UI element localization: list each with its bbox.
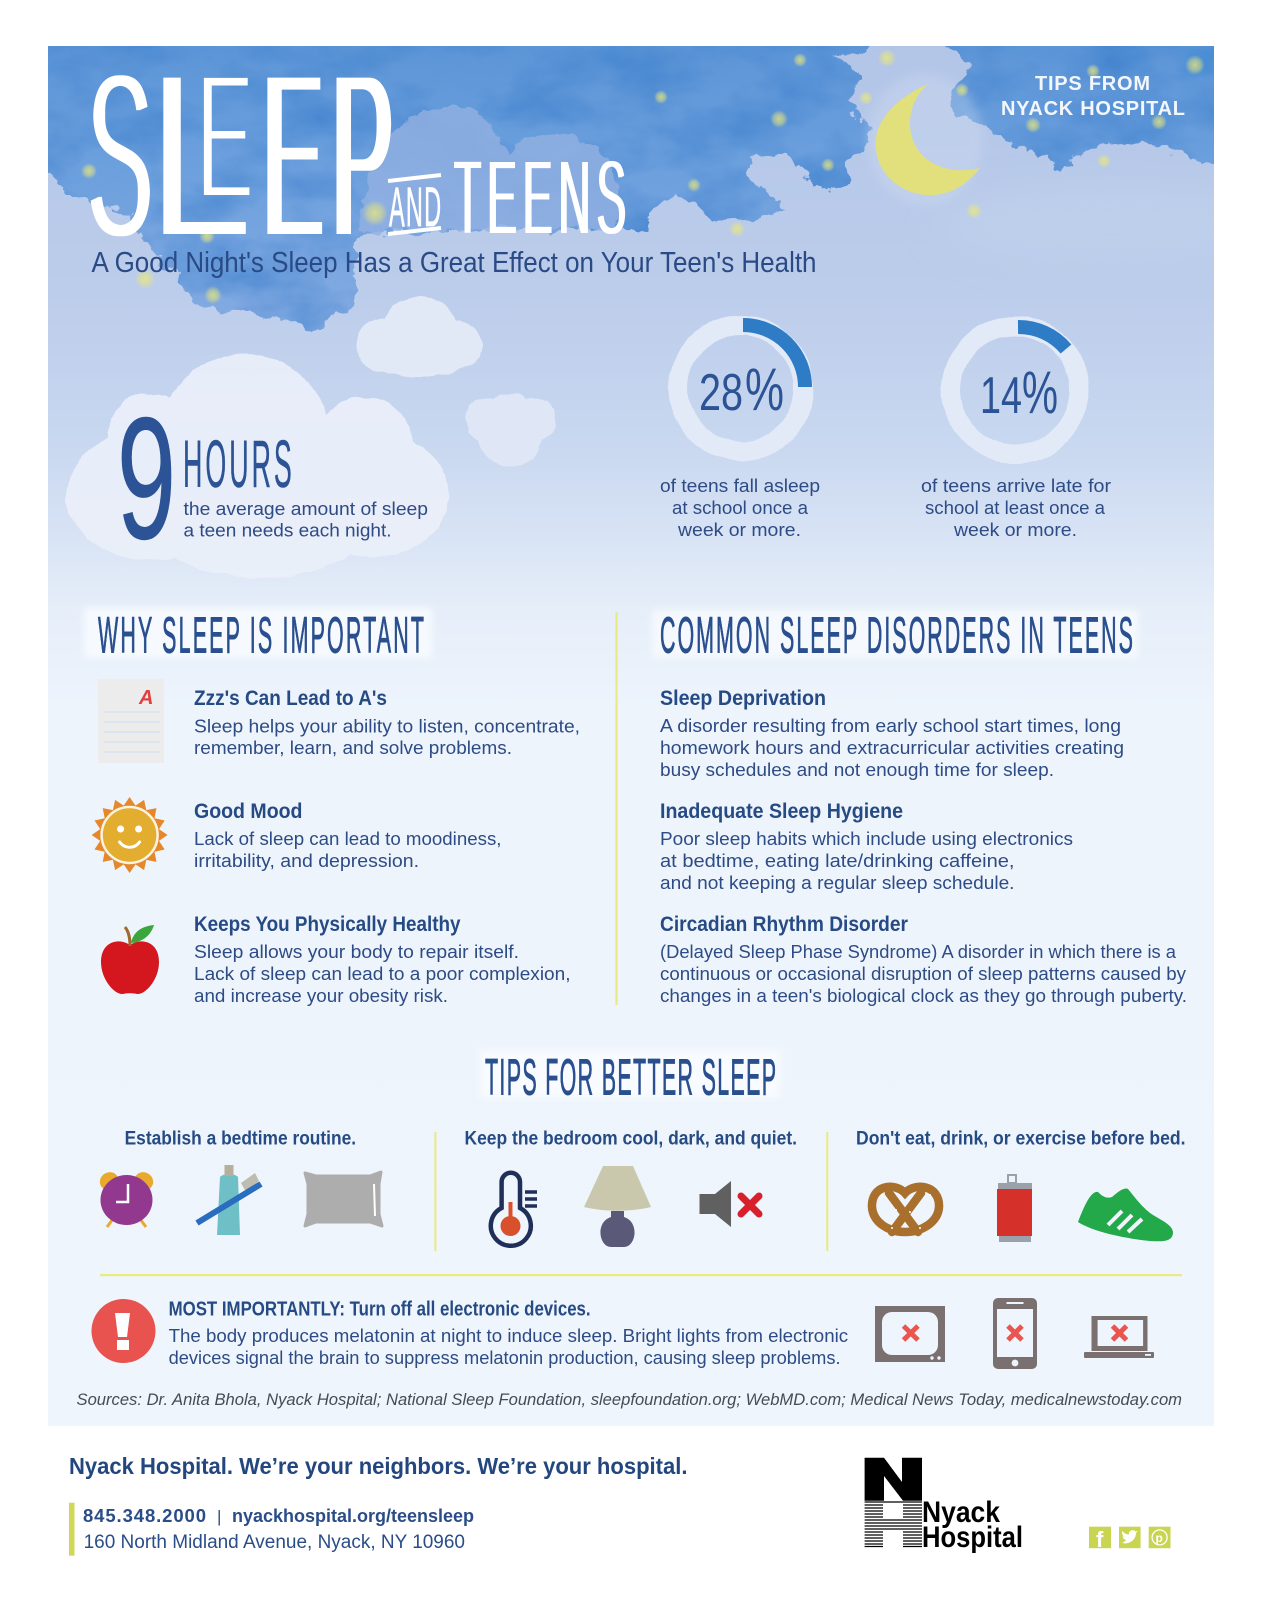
tip heading: don't eat: Don't eat, drink, or exercise before bed. — [856, 1128, 1186, 1150]
tip heading: bedtime routine: Establish a bedtime routine. — [125, 1128, 356, 1150]
stars — [81, 49, 1205, 304]
callout text — [169, 1326, 848, 1368]
item: sleep deprivation: Sleep Deprivation — [660, 687, 826, 710]
item: physically healthy: and increase your obesity risk. — [194, 986, 448, 1006]
stat text: 28 percent — [660, 476, 820, 540]
panel: common sleep disorders — [652, 608, 1187, 1006]
icon: pillow — [305, 1172, 382, 1226]
icon: apple — [101, 925, 159, 994]
title: Sleep and Teens — [87, 24, 626, 288]
icon: soda can — [997, 1175, 1032, 1242]
callout text: devices signal the brain to suppress melatonin production, causing sleep problems. — [169, 1348, 841, 1368]
icon: pretzel — [872, 1187, 939, 1232]
icon: toothbrush and toothpaste — [197, 1165, 261, 1235]
item: inadequate sleep hygiene: Inadequate Sleep Hygiene — [660, 800, 903, 823]
donut chart: 14 percent: 14 — [980, 367, 1022, 425]
icon: smiling sun — [92, 797, 168, 873]
donut chart: 28 percent: % — [745, 356, 784, 423]
icon: red exclamation — [92, 1299, 156, 1363]
logo: Nyack Hospital: Hospital — [922, 1521, 1023, 1554]
callout: most importantly — [92, 1298, 1154, 1369]
title: Sleep and Teens: P — [332, 24, 393, 288]
footer: contact: 160 North Midland Avenue, Nyack, NY 10960 — [84, 1532, 465, 1553]
item: zzz's: Zzz's Can Lead to A's — [194, 687, 387, 710]
item: physically healthy: Keeps You Physically Healthy — [194, 913, 461, 936]
stat text: 28 percent: of teens fall asleep — [660, 476, 820, 496]
item: zzz's: Sleep helps your ability to listen, concentrate, — [194, 716, 580, 736]
footer: contact: | — [217, 1507, 221, 1526]
item: sleep deprivation: busy schedules and not enough time for sleep. — [660, 760, 1054, 780]
item: circadian rhythm disorder: Circadian Rhythm Disorder — [660, 913, 908, 936]
icon: laptop — [1084, 1316, 1154, 1358]
icon: crescent moon — [875, 84, 980, 195]
stat: 9 hours: the average amount of sleep — [184, 499, 428, 519]
callout text: The body produces melatonin at night to induce sleep. Bright lights from electronic — [169, 1326, 848, 1346]
big cloud — [66, 354, 449, 578]
footer: tagline: Nyack Hospital. We’re your neighbors. We’re your hospital. — [69, 1453, 688, 1479]
item: circadian rhythm disorder: continuous or occasional disruption of sleep patterns caused by — [660, 964, 1186, 984]
social icons — [1089, 1527, 1170, 1552]
small cloud one — [356, 296, 482, 377]
item: good mood: Good Mood — [194, 800, 302, 823]
heading: why sleep is important: WHY SLEEP IS IMPORTANT — [98, 608, 424, 664]
stat: 9 hours: HOURS — [183, 427, 292, 501]
item: good mood — [194, 800, 502, 871]
panel: why sleep is important — [84, 608, 580, 1006]
tips from label: TIPS FROM — [1035, 73, 1150, 95]
icon: sneaker — [1078, 1189, 1173, 1241]
tip heading: bedroom: Keep the bedroom cool, dark, and quiet. — [464, 1128, 797, 1150]
item: inadequate sleep hygiene: and not keeping a regular sleep schedule. — [660, 873, 1014, 893]
title: Sleep and Teens: S — [87, 24, 153, 288]
item: zzz's — [194, 687, 580, 758]
icon: thermometer — [491, 1173, 537, 1246]
title: Sleep and Teens: L — [148, 24, 252, 288]
item: inadequate sleep hygiene — [660, 800, 1073, 893]
stat: 9 hours: a teen needs each night. — [184, 520, 392, 540]
item: good mood: irritability, and depression. — [194, 851, 419, 871]
heading: common sleep disorders in teens: COMMON SLEEP DISORDERS IN TEENS — [660, 608, 1133, 664]
logo: Nyack Hospital — [865, 1458, 1023, 1554]
item: sleep deprivation — [660, 687, 1124, 780]
item: zzz's: remember, learn, and solve problems. — [194, 738, 512, 758]
small cloud two — [465, 393, 555, 466]
sources: Sources: Dr. Anita Bhola, Nyack Hospital; National Sleep Foundation, sleepfoundation.org; WebMD.com; Medical News Today, medicalnewstoday.com — [76, 1390, 1182, 1409]
item: physically healthy: Sleep allows your body to repair itself. — [194, 942, 519, 962]
item: sleep deprivation: homework hours and extracurricular activities creating — [660, 738, 1124, 758]
social icons: f — [1096, 1527, 1104, 1552]
item: inadequate sleep hygiene: at bedtime, eating late/drinking caffeine, — [660, 851, 1014, 871]
stat: 9 hours — [117, 381, 428, 575]
donut chart: 14 percent — [951, 326, 1079, 454]
logo: Nyack Hospital: Nyack — [922, 1496, 1000, 1529]
icon: smartphone — [993, 1298, 1037, 1369]
tips from label: NYACK HOSPITAL — [1001, 98, 1185, 120]
footer: contact: nyackhospital.org/teensleep — [232, 1505, 474, 1526]
title: Sleep and Teens: TEENS — [454, 139, 626, 257]
title: Sleep and Teens: E — [263, 24, 323, 288]
item: circadian rhythm disorder: changes in a teen's biological clock as they go through puberty. — [660, 986, 1187, 1006]
subtitle: A Good Night's Sleep Has a Great Effect on Your Teen's Health — [92, 247, 816, 279]
stat text: 28 percent: week or more. — [677, 520, 801, 540]
donut chart: 28 percent: 28 — [699, 364, 743, 422]
donut chart: 28 percent — [678, 325, 805, 451]
footer: contact — [69, 1503, 474, 1556]
callout heading: MOST IMPORTANTLY: Turn off all electronic devices. — [169, 1299, 591, 1321]
stat text: 14 percent: week or more. — [953, 520, 1077, 540]
item: inadequate sleep hygiene: Poor sleep habits which include using electronics — [660, 829, 1073, 849]
stat text: 14 percent — [921, 476, 1111, 540]
tips from label — [1001, 73, 1185, 120]
item: circadian rhythm disorder: (Delayed Sleep Phase Syndrome) A disorder in which there is a — [660, 942, 1177, 962]
stat text: 28 percent: at school once a — [672, 498, 809, 518]
social icons: p — [1156, 1531, 1163, 1545]
item: sleep deprivation: A disorder resulting from early school start times, long — [660, 716, 1121, 736]
item: physically healthy: Lack of sleep can lead to a poor complexion, — [194, 964, 570, 984]
title: Sleep and Teens: AND — [389, 176, 441, 239]
stat text: 14 percent: school at least once a — [925, 498, 1106, 518]
footer: contact: 845.348.2000 — [83, 1505, 206, 1526]
stat: 9 hours: 9 — [117, 381, 176, 575]
item: physically healthy — [194, 913, 570, 1006]
icon: muted speaker — [700, 1181, 759, 1227]
stat text: 14 percent: of teens arrive late for — [921, 476, 1111, 496]
icon: television — [875, 1306, 945, 1362]
donut chart: 14 percent: % — [1022, 359, 1058, 426]
item: circadian rhythm disorder — [660, 913, 1187, 1006]
item: good mood: Lack of sleep can lead to moodiness, — [194, 829, 502, 849]
icon: alarm clock — [96, 1169, 157, 1227]
title: Sleep and Teens: E — [197, 36, 253, 236]
panel: tips for better sleep — [96, 1050, 1186, 1247]
heading: tips for better sleep: TIPS FOR BETTER SLEEP — [485, 1050, 776, 1106]
icon: lamp — [584, 1166, 651, 1247]
icon: graded paper: A — [138, 687, 153, 709]
icon: graded paper — [98, 679, 164, 763]
